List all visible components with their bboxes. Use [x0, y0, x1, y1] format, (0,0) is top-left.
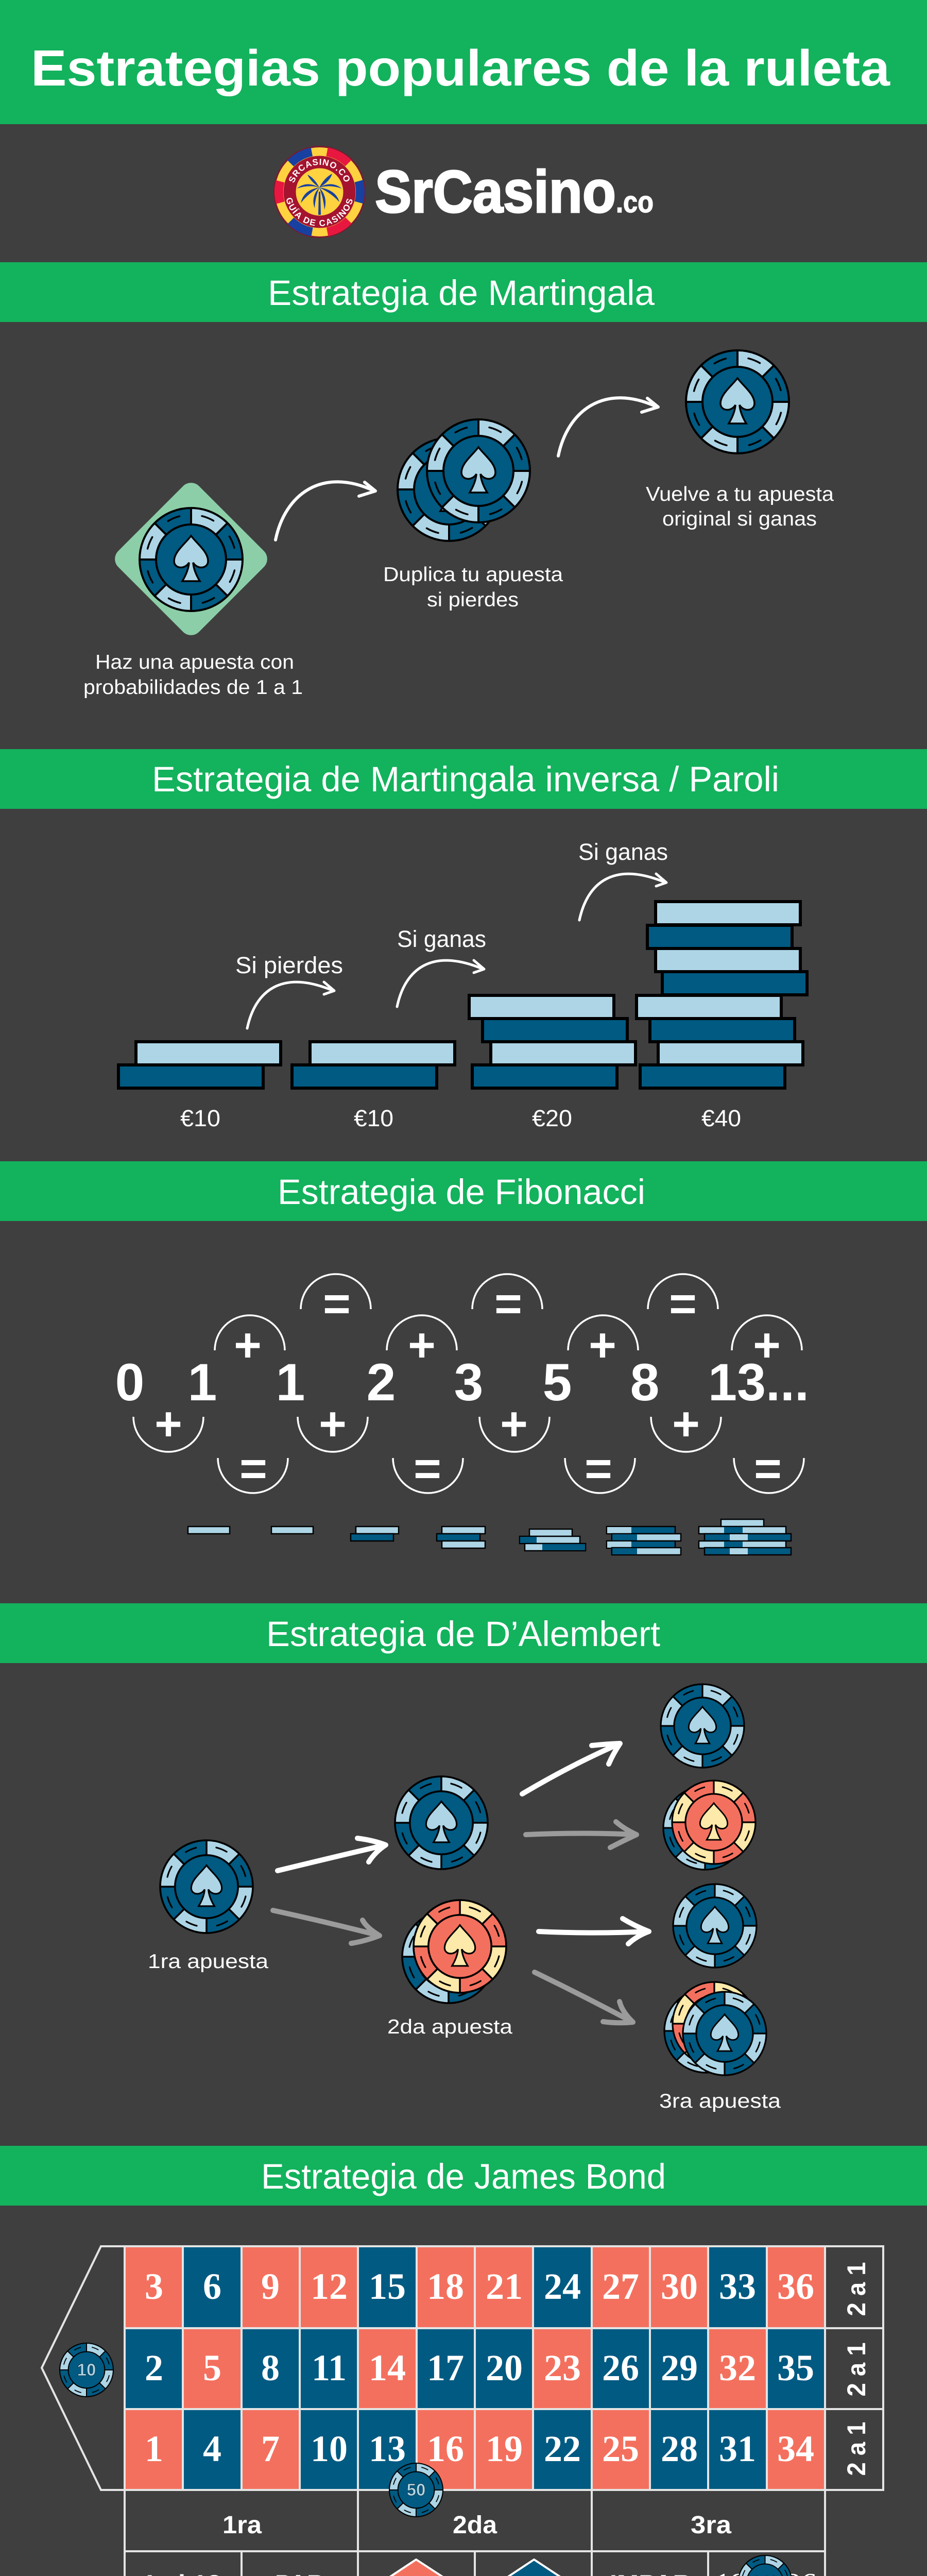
chip: 10: 10: [77, 2360, 96, 2379]
column bets: 2 a 1: 2 a 1: [842, 2262, 871, 2316]
lower equals arcs: =: [754, 1443, 782, 1495]
panel: Estrategia de Fibonacci: [0, 1161, 927, 1555]
cell numbers: 13: [369, 2428, 406, 2469]
stack: 1: [188, 1527, 230, 1534]
cell numbers: 20: [486, 2347, 523, 2388]
caption: Duplica tu apuesta: si pierdes: [427, 589, 519, 611]
upper equals arcs: =: [323, 1278, 351, 1330]
blue diamond: [501, 2560, 568, 2576]
amount labels: [180, 1105, 741, 1131]
cell numbers: 22: [544, 2428, 581, 2469]
icon: two stacked chips: [398, 419, 530, 541]
lower equals arcs: =: [585, 1443, 612, 1495]
lower plus arcs: +: [319, 1398, 347, 1450]
dozen labels: [222, 2512, 731, 2539]
cell numbers: 1: [145, 2428, 163, 2469]
table grid lines: [42, 2246, 883, 2576]
lower plus arcs: +: [672, 1398, 700, 1450]
lower plus arcs: +: [154, 1398, 182, 1450]
cell numbers: 34: [777, 2428, 814, 2469]
cell numbers: 3: [145, 2266, 163, 2307]
chip: 50: [389, 2463, 443, 2517]
panel: Estrategia de D'Alembert: [0, 1603, 927, 2112]
stack: 13: [699, 1519, 791, 1555]
cell numbers: 25: [602, 2428, 639, 2469]
dozen labels: 3ra: [691, 2512, 731, 2539]
heading: Estrategia de Fibonacci: [0, 1161, 927, 1221]
heading: Estrategia de D'Alembert: Estrategia de D’Alembert: [266, 1614, 660, 1654]
upper plus arcs: +: [589, 1319, 616, 1371]
cell numbers: 2: [145, 2347, 163, 2388]
stack: 8: [607, 1527, 681, 1555]
chip: 10: [60, 2343, 113, 2397]
arrow: lose to lower second bet: [273, 1910, 380, 1943]
chip stack: 10 second: [292, 1042, 455, 1088]
stack: 3: [437, 1527, 485, 1548]
heading: Estrategia de Martingala: [0, 262, 927, 322]
caption: Haz una apuesta: probabilidades de 1 a 1: [83, 676, 303, 699]
cell numbers: 6: [203, 2266, 221, 2307]
roulette table: [42, 2246, 883, 2576]
lower equals arcs: =: [239, 1443, 267, 1495]
cell numbers: 33: [719, 2266, 756, 2307]
fibonacci number sequence: 0: [115, 1353, 144, 1412]
chip stack: 40: [637, 902, 807, 1088]
cell numbers: 4: [203, 2428, 221, 2469]
cell numbers: 19: [486, 2428, 523, 2469]
fibonacci number sequence: 1: [188, 1353, 217, 1412]
cell numbers: 15: [369, 2266, 406, 2307]
fibonacci number sequence: [115, 1353, 809, 1412]
upper equals arcs: [301, 1274, 718, 1330]
amount labels: €20: [532, 1105, 572, 1131]
chip stack: 10 first: [118, 1042, 281, 1088]
label: Si pierdes: Si pierdes: [235, 952, 343, 978]
title: [0, 0, 927, 124]
caption: 2da apuesta: 2da apuesta: [387, 2016, 512, 2038]
upper plus arcs: +: [234, 1319, 262, 1371]
heading: Estrategia de James Bond: Estrategia de James Bond: [261, 2157, 666, 2196]
icon: logo casino chip with palm: SRCASINO.CO: [289, 159, 350, 182]
chip: 50: 50: [407, 2480, 425, 2499]
icon: first bet chip: [160, 1840, 253, 1933]
cell numbers: 12: [311, 2266, 348, 2307]
column bets: 2 a 1: [842, 2262, 871, 2476]
cell numbers: 23: [544, 2347, 581, 2388]
lower plus arcs: [133, 1398, 721, 1452]
arrow: lower win: [539, 1919, 649, 1944]
caption: Haz una apuesta: Haz una apuesta con: [95, 651, 294, 673]
cell numbers: 5: [203, 2347, 221, 2388]
caption: 1ra apuesta: 1ra apuesta: [148, 1951, 268, 1973]
arrow: win to upper second bet: [278, 1838, 386, 1871]
cell numbers: 17: [427, 2347, 464, 2388]
cell numbers: 26: [602, 2347, 639, 2388]
arrow: Si ganas third: [579, 874, 666, 920]
icon: third bet blue chip top: [661, 1684, 744, 1768]
icon: third bet triple stack: [664, 1982, 766, 2075]
heading: Estrategia de Martingala inversa / Paroli: [0, 749, 927, 809]
icon: upper second bet chip: [395, 1776, 488, 1869]
arrow: Si ganas second: [397, 960, 484, 1007]
heading: Estrategia de D'Alembert: [0, 1603, 927, 1663]
dozen labels: 1ra: [222, 2512, 262, 2539]
logo: SrCasino.co: [273, 146, 654, 238]
arrow: step one to step two: [276, 482, 375, 540]
heading: Estrategia de James Bond: [0, 2146, 927, 2206]
cell numbers: 14: [369, 2347, 406, 2388]
label: Si ganas second: Si ganas: [397, 926, 486, 952]
upper plus arcs: [215, 1315, 802, 1371]
panel: Martingala inversa / Paroli: [0, 749, 927, 1131]
stack: 1 second: [271, 1527, 313, 1534]
fibonacci number sequence: 5: [543, 1353, 572, 1412]
heading: Estrategia de Fibonacci: Estrategia de Fibonacci: [278, 1172, 645, 1212]
outside bet labels: [142, 2570, 692, 2576]
caption: Vuelve a tu apuesta: Vuelve a tu apuesta: [646, 483, 834, 505]
arrow: step two to step three: [558, 398, 658, 456]
cell numbers: 31: [719, 2428, 756, 2469]
cell numbers: 16: [427, 2428, 464, 2469]
fibonacci number sequence: 1: [276, 1353, 305, 1412]
wordmark: SrCasino: [375, 158, 616, 225]
stack: 5: [520, 1529, 586, 1551]
icon: lower second bet stacked chips: [402, 1900, 506, 2003]
cell numbers: 27: [602, 2266, 639, 2307]
cell numbers: 32: [719, 2347, 756, 2388]
caption: 3ra apuesta: 3ra apuesta: [659, 2090, 781, 2112]
lower equals arcs: =: [414, 1443, 441, 1495]
arrow: lower lose: [535, 1972, 633, 2023]
cell numbers: 18: [427, 2266, 464, 2307]
icon: single chip: [686, 350, 789, 453]
arrow: upper win: [522, 1743, 620, 1794]
stack: 2: [351, 1527, 399, 1541]
cell numbers: 29: [661, 2347, 698, 2388]
amount labels: €10: [354, 1105, 393, 1131]
cell numbers: 10: [311, 2428, 348, 2469]
caption: Duplica tu apuesta: Duplica tu apuesta: [383, 564, 563, 586]
upper equals arcs: =: [494, 1278, 522, 1330]
cell numbers: 8: [261, 2347, 280, 2388]
caption: Vuelve a tu apuesta: original si ganas: [662, 508, 817, 530]
column bets: 2 a 1: 2 a 1: [842, 2342, 871, 2397]
chip stack: 20: [469, 995, 636, 1088]
label: Si ganas third: Si ganas: [578, 839, 668, 865]
heading: Estrategia de Martingala inversa / Paroli: Estrategia de Martingala inversa / Paroli: [152, 759, 779, 799]
wordmark: .co: [616, 185, 654, 219]
cell numbers: 28: [661, 2428, 698, 2469]
cell numbers: 21: [486, 2266, 523, 2307]
upper plus arcs: +: [408, 1319, 436, 1371]
cell numbers: [145, 2266, 814, 2469]
fibonacci number sequence: 13...: [708, 1353, 809, 1412]
cell numbers: 35: [777, 2347, 814, 2388]
fibonacci number sequence: 3: [454, 1353, 483, 1412]
cell numbers: 11: [312, 2347, 347, 2388]
caption: Vuelve a tu apuesta: [646, 483, 834, 530]
arrow: upper lose: [526, 1822, 637, 1848]
cell numbers: 36: [777, 2266, 814, 2307]
cell numbers: 30: [661, 2266, 698, 2307]
number cells: [125, 2246, 825, 2490]
upper plus arcs: +: [753, 1319, 781, 1371]
small chip stacks row: [188, 1519, 791, 1555]
lower plus arcs: +: [500, 1398, 528, 1450]
lower equals arcs: [218, 1443, 804, 1495]
cell numbers: 9: [261, 2266, 280, 2307]
panel: Estrategia de Martingala: [0, 262, 927, 699]
column bets: 2 a 1: 2 a 1: [842, 2421, 871, 2476]
upper equals arcs: =: [669, 1278, 697, 1330]
amount labels: €10: [180, 1105, 220, 1131]
fibonacci number sequence: 8: [630, 1353, 659, 1412]
caption: Haz una apuesta: [83, 651, 303, 699]
panel: Estrategia de James Bond: [0, 2146, 927, 2576]
amount labels: €40: [701, 1105, 741, 1131]
arrow: Si pierdes: [247, 982, 334, 1028]
title: Estrategias populares de la ruleta: [31, 40, 891, 96]
fibonacci number sequence: 2: [367, 1353, 396, 1412]
cell numbers: 7: [261, 2428, 280, 2469]
icon: chip on green diamond: [110, 478, 272, 640]
red diamond: [383, 2560, 450, 2576]
icon: third bet blue chip: [673, 1884, 757, 1968]
chip: 140: [739, 2555, 792, 2576]
heading: Estrategia de Martingala: Estrategia de Martingala: [268, 273, 655, 313]
caption: Duplica tu apuesta: [383, 564, 563, 611]
icon: logo casino chip with palm: [273, 146, 366, 238]
icon: logo casino chip with palm: GUÍA DE CASINOS: [286, 198, 352, 226]
cell numbers: 24: [544, 2266, 581, 2307]
icon: third bet red over blue: [663, 1781, 756, 1870]
dozen labels: 2da: [453, 2512, 497, 2539]
